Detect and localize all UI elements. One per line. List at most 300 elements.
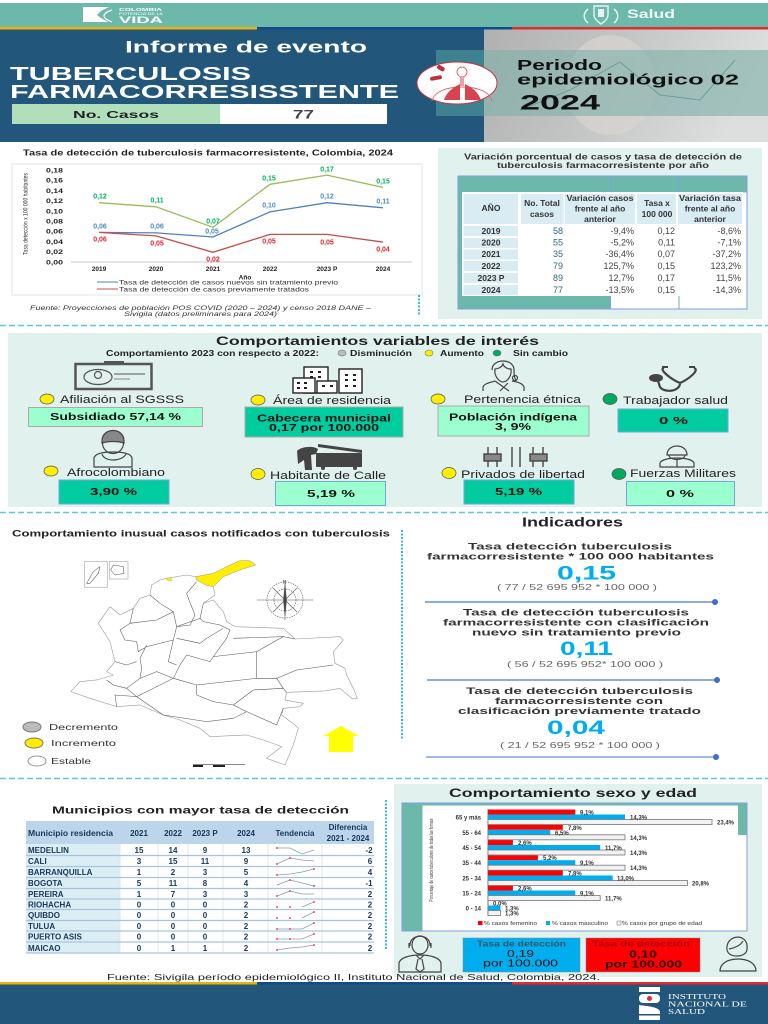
- map legend: Estable: [51, 756, 91, 766]
- municipal rows: 2: [368, 911, 373, 920]
- item: Privados de libertad: [442, 447, 585, 504]
- y axis labels: 0,04: [46, 239, 64, 246]
- indicator 3: ( 21 / 52 695 952 * 100 000 ): [500, 741, 661, 750]
- municipal rows: 1: [203, 944, 208, 953]
- municipal rows: 8: [203, 879, 208, 888]
- y axis labels: 0,10: [46, 208, 64, 215]
- item: Afiliación al SGSSS: Afiliación al SGSSS: [60, 394, 184, 406]
- icon: id card: [76, 361, 152, 389]
- table rows: 2019: [482, 226, 501, 236]
- source footer text: Fuente: Sivigila período epidemiológico II, Instituto Nacional de Salud, Colombia, 2024.: [107, 972, 600, 982]
- bar value labels: 14,3%: [630, 836, 648, 842]
- bar value labels: 20,8%: [692, 882, 710, 888]
- municipal rows: 2: [368, 944, 373, 953]
- table body: 35: [553, 249, 563, 259]
- chart legend: Tasa de detección de casos nuevos sin tratamiento previo: [119, 280, 338, 286]
- municipal rows: 0: [137, 911, 142, 920]
- table header: [482, 193, 741, 224]
- table body: 77: [553, 285, 563, 295]
- icon: prison bars: [484, 447, 547, 467]
- item: Fuerzas Militares: [612, 446, 737, 506]
- item: Habitante de Calle: 5,19 %: [307, 489, 355, 500]
- item: Área de residencia: 0,17 por 100.000: [269, 423, 380, 434]
- x axis labels: Año: [239, 274, 251, 282]
- indicator 1: ( 77 / 52 695 952 * 100 000 ): [497, 583, 658, 592]
- item: Privados de libertad: 5,19 %: [495, 487, 542, 498]
- box: female rate: [586, 938, 700, 972]
- municipal rows: 11: [169, 879, 178, 888]
- y axis labels: [46, 168, 64, 266]
- box: male rate: por 100.000: [483, 958, 559, 970]
- data labels: 0,04: [376, 246, 390, 254]
- table header: No. Total: [524, 198, 560, 208]
- table body: -13,5%: [605, 285, 634, 295]
- logo: Colombia Potencia de la Vida: [83, 7, 164, 25]
- title: [10, 64, 399, 102]
- age labels: [456, 816, 482, 912]
- icon: lungs and pills: [417, 62, 497, 104]
- municipal rows: 2: [244, 900, 249, 910]
- map legend: Incremento: [51, 738, 116, 748]
- municipal rows: 2: [244, 944, 249, 953]
- municipal rows: 3: [137, 857, 142, 866]
- period text: epidemiológico 02: [517, 72, 739, 88]
- bar value labels: 9,1%: [580, 892, 594, 898]
- municipal rows: -2: [365, 846, 373, 855]
- logo: Salud crest: [584, 6, 675, 24]
- indicator 3: clasificación previamente tratado: [458, 706, 701, 717]
- municipal rows: 3: [203, 868, 208, 877]
- compass rose: N: [282, 580, 286, 586]
- bar value labels: 9,1%: [580, 861, 594, 867]
- data labels: 0,15: [262, 176, 276, 182]
- logo: Colombia Potencia de la Vida: COLOMBIA: [119, 7, 163, 12]
- item: Pertenencia étnica: 3, 9%: [495, 422, 531, 433]
- box: male rate: 0,19: [507, 949, 535, 960]
- municipal rows: 2: [368, 900, 373, 910]
- case counter: [12, 104, 387, 124]
- table body: 0,15: [657, 261, 675, 271]
- municipal rows: 5: [137, 879, 142, 888]
- chart source note: Sivigila (datos preliminares para 2024): [124, 311, 277, 318]
- bar value labels: 11,7%: [605, 896, 622, 902]
- municipal rows: MAICAO: [28, 944, 60, 953]
- box: female rate: por 100.000: [605, 960, 683, 970]
- data labels: 0,06: [93, 224, 107, 230]
- indicator 2: nuevo sin tratamiento previo: [472, 628, 681, 638]
- bar legend: % casos femenino: [484, 921, 537, 927]
- table body: -7,1%: [717, 238, 741, 248]
- table body: 0,17: [657, 273, 675, 283]
- municipal rows: 1: [137, 868, 142, 877]
- municipal rows: 0: [137, 944, 142, 953]
- bar value labels: 2,6%: [518, 841, 532, 847]
- sparklines: [276, 847, 315, 951]
- case counter: 77: [293, 108, 314, 122]
- data labels: [93, 166, 390, 264]
- item: Área de residencia: [245, 367, 403, 437]
- indicator 2: farmacorresistente con clasificación: [443, 618, 709, 628]
- municipal rows: 0: [171, 932, 176, 942]
- data labels: 0,05: [150, 240, 164, 248]
- table rows: 2022: [482, 261, 501, 271]
- table header: 2021: [130, 829, 148, 838]
- item: Pertenencia étnica: [431, 361, 589, 436]
- x axis labels: 2020: [149, 266, 164, 273]
- table body: 0,15: [657, 285, 675, 295]
- municipal rows: 13: [242, 846, 251, 855]
- item: Afiliación al SGSSS: [28, 361, 202, 426]
- table body: -9,4%: [610, 226, 634, 236]
- compass rose: [257, 580, 313, 620]
- icon: stethoscope: [649, 367, 696, 391]
- bar value labels: 7,8%: [568, 872, 582, 878]
- scale bar: [193, 764, 245, 767]
- y axis title: Tasa detección x 100 000 habitantes: [22, 172, 30, 255]
- top government bar: [0, 3, 768, 28]
- table rows: 2021: [482, 249, 501, 259]
- bar value labels: 13,0%: [617, 876, 635, 882]
- item: Área de residencia: Área de residencia: [273, 394, 392, 407]
- municipal rows: [28, 846, 373, 953]
- table header: Variación tasa: [679, 193, 741, 203]
- bar value labels: 0,0%: [493, 902, 507, 908]
- bar value labels: 23,4%: [717, 820, 735, 826]
- age group bars: [488, 810, 712, 916]
- chart title: Tasa de detección de tuberculosis farmacorresistente, Colombia, 2024: [23, 148, 393, 158]
- y axis labels: 0,08: [46, 218, 64, 226]
- footer band: [0, 982, 768, 1024]
- y axis labels: 0,14: [46, 188, 64, 195]
- municipal rows: TULUA: [28, 922, 55, 931]
- logo: Instituto Nacional de Salud: NACIONAL DE: [668, 1000, 748, 1008]
- table title: tuberculosis farmacorresistente por año: [497, 161, 709, 170]
- item: Afrocolombiano: [44, 430, 169, 504]
- chart frame: [402, 803, 747, 931]
- table body: 11,5%: [716, 273, 741, 283]
- municipal rows: 0: [171, 911, 176, 920]
- x axis labels: 2022: [263, 266, 278, 273]
- panel: indicators: [425, 514, 720, 760]
- Colombia map: [71, 561, 357, 765]
- table body: 0,07: [657, 249, 675, 259]
- table title: Variación porcentual de casos y tasa de detección de: [464, 152, 743, 162]
- box: female rate: 0,10: [629, 950, 658, 960]
- box: male rate: [463, 938, 580, 972]
- municipal rows: 0: [171, 922, 176, 931]
- item: Fuerzas Militares: 0 %: [666, 489, 694, 500]
- municipal rows: 3: [244, 890, 249, 899]
- data labels: 0,11: [150, 198, 164, 204]
- title: FARMACORRESISSTENTE: [10, 82, 399, 102]
- item: Trabajador salud: 0 %: [659, 416, 688, 427]
- municipal rows: 4: [244, 879, 249, 888]
- indicator 3: farmacorresistente con: [495, 696, 663, 707]
- panel: municipalities table: [26, 806, 374, 953]
- indicator 1: farmacorresistente * 100 000 habitantes: [427, 552, 714, 562]
- data labels: 0,11: [376, 198, 390, 206]
- table backgrounds: [26, 821, 374, 953]
- indicator 1: Tasa detección tuberculosis: [468, 542, 672, 552]
- title: TUBERCULOSIS: [10, 64, 251, 84]
- item: Pertenencia étnica: Población indígena: [449, 412, 577, 424]
- case counter: No. Casos: [73, 109, 159, 121]
- x axis labels: [92, 266, 391, 282]
- item: Habitante de Calle: Habitante de Calle: [270, 470, 386, 482]
- table rows: 2024: [482, 285, 501, 295]
- table header: anterior: [584, 214, 617, 224]
- table header: Municipio residencia: [28, 829, 114, 838]
- period text: 2024: [520, 92, 601, 114]
- bar value labels: 14,3%: [630, 866, 648, 872]
- municipal rows: RIOHACHA: [28, 900, 71, 910]
- logo: Instituto Nacional de Salud: [639, 987, 748, 1020]
- x axis labels: 2021: [206, 266, 221, 273]
- table header: frente al año: [685, 204, 735, 214]
- municipal rows: 2: [244, 911, 249, 920]
- age labels: 35 - 44: [462, 861, 482, 867]
- tricolor stripe: [0, 27, 768, 30]
- icon: soldier: [660, 446, 694, 467]
- x axis labels: 2019: [92, 266, 107, 273]
- municipal rows: 1: [171, 944, 176, 953]
- indicator 2: Tasa de detección tuberculosis: [463, 608, 689, 618]
- chart frame: [12, 164, 422, 295]
- municipal rows: 0: [137, 922, 142, 931]
- table rows: [478, 226, 505, 295]
- bar value labels: 9,1%: [580, 810, 594, 816]
- municipal rows: 4: [368, 868, 373, 877]
- icon: woman: [720, 937, 756, 971]
- header banner: [0, 30, 768, 142]
- y axis labels: 0,06: [46, 229, 64, 236]
- period text: [517, 57, 739, 114]
- table header: frente al año: [575, 204, 625, 214]
- data labels: 0,02: [206, 256, 220, 264]
- bar value labels: 5,2%: [543, 856, 557, 862]
- bar legend: % casos masculino: [552, 921, 608, 927]
- table header: AÑO: [482, 203, 501, 213]
- box: female rate: Tasa de detección: [592, 940, 690, 948]
- table body: 79: [553, 261, 563, 271]
- municipal rows: -1: [365, 879, 373, 888]
- logo: Colombia Potencia de la Vida: POTENCIA DE LA: [119, 12, 164, 16]
- bar value labels: 2,6%: [518, 886, 532, 892]
- table header: 2024: [237, 829, 255, 838]
- y axis title: Porcentaje de casos tuberculosis de todas las formas: [429, 818, 435, 902]
- chart legend: Tasa de detección de casos previamente tratados: [119, 286, 310, 294]
- chart source note: Fuente: Proyecciones de población POS COVID (2020 – 2024) y censo 2018 DANE –: [30, 305, 372, 312]
- map legend: [23, 722, 118, 766]
- chart legend: [97, 280, 338, 294]
- table body: 125,7%: [603, 261, 634, 271]
- table header: anterior: [694, 214, 727, 224]
- table body: [462, 192, 743, 296]
- line chart panel: [12, 148, 422, 295]
- item: Habitante de Calle: [251, 444, 386, 506]
- icon: dumpster with person: [297, 444, 362, 470]
- indicator 2: [427, 608, 720, 683]
- item: Afrocolombiano: 3,90 %: [90, 487, 137, 498]
- table header: Tendencia: [276, 829, 315, 838]
- table body: -37,2%: [712, 249, 741, 259]
- logo: Colombia Potencia de la Vida: VIDA: [119, 15, 164, 25]
- municipal rows: 9: [203, 846, 208, 855]
- table rows: 2023 P: [478, 273, 505, 283]
- table frame: [458, 176, 747, 309]
- age labels: 65 y más: [456, 816, 482, 822]
- icon: man: [399, 936, 441, 972]
- period text: Periodo: [517, 57, 602, 74]
- municipal rows: 0: [171, 900, 176, 910]
- data labels: 0,12: [93, 194, 107, 200]
- municipal rows: 0: [203, 932, 208, 942]
- data labels: 0,05: [262, 238, 276, 246]
- municipal rows: 2: [171, 868, 176, 877]
- indicator 1: 0,15: [557, 564, 617, 584]
- box: male rate: Tasa de detección: [477, 940, 566, 948]
- indicator 1: [425, 542, 718, 605]
- table body: 0,11: [658, 238, 675, 248]
- yellow up arrow: [323, 726, 359, 752]
- municipal rows: 14: [169, 846, 178, 855]
- y axis labels: 0,00: [46, 259, 64, 266]
- bar value labels: 11,7%: [605, 846, 622, 852]
- municipal rows: 7: [171, 890, 176, 899]
- behaviour legend: Aumento: [440, 349, 484, 358]
- age labels: 15 - 24: [462, 892, 482, 898]
- municipal rows: PEREIRA: [28, 890, 64, 899]
- municipal rows: PUERTO ASIS: [28, 932, 82, 942]
- behaviour legend: [106, 349, 568, 358]
- item: Afiliación al SGSSS: Subsidiado 57,14 %: [50, 412, 181, 423]
- bar value labels: 14,3%: [630, 816, 648, 822]
- indicator 2: ( 56 / 52 695 952* 100 000 ): [507, 660, 664, 669]
- age labels: 25 - 34: [462, 876, 482, 882]
- data labels: 0,12: [320, 194, 334, 200]
- map heading: Comportamiento inusual casos notificados con tuberculosis: [12, 528, 390, 538]
- table body: 89: [553, 273, 563, 283]
- bar value labels: [493, 810, 735, 918]
- table body: 123,2%: [710, 261, 741, 271]
- municipal rows: 0: [203, 900, 208, 910]
- item: Trabajador salud: [603, 367, 728, 432]
- municipal rows: 5: [244, 868, 249, 877]
- icon: buildings: [293, 367, 362, 393]
- age labels: 45 - 54: [462, 846, 482, 852]
- municipal rows: 2: [244, 922, 249, 931]
- table body: 58: [553, 226, 563, 236]
- data labels: 0,15: [376, 178, 390, 186]
- table body: 12,7%: [608, 273, 634, 283]
- age labels: 0 - 14: [466, 906, 482, 912]
- panel: variables of interest: [8, 333, 762, 507]
- y axis labels: 0,02: [46, 249, 64, 256]
- indicator 3: Tasa de detección tuberculosis: [466, 686, 693, 697]
- data labels: 0,10: [262, 202, 276, 210]
- municipal rows: 0: [137, 932, 142, 942]
- item: Área de residencia: Cabecera municipal: [257, 412, 391, 424]
- municipal rows: 2: [244, 932, 249, 942]
- table body: -8,6%: [717, 226, 741, 236]
- data labels: 0,05: [320, 240, 334, 246]
- municipal rows: 0: [137, 900, 142, 910]
- table header: [28, 823, 370, 843]
- municipal rows: BARRANQUILLA: [28, 868, 93, 877]
- item: Afrocolombiano: Afrocolombiano: [67, 467, 165, 479]
- municipal rows: 15: [135, 846, 144, 855]
- age labels: 55 - 64: [462, 831, 482, 837]
- bar value labels: 7,8%: [568, 826, 582, 832]
- item: Pertenencia étnica: Pertenencia étnica: [464, 394, 582, 406]
- indicator 3: [426, 686, 719, 760]
- bar value labels: 1,3%: [505, 906, 519, 912]
- y axis labels: 0,18: [46, 168, 64, 174]
- municipal rows: 0: [203, 911, 208, 920]
- data labels: 0,06: [150, 224, 164, 230]
- table body: -5,2%: [610, 238, 634, 248]
- heading: Informe de evento: Informe de evento: [125, 38, 367, 56]
- data labels: 0,07: [206, 218, 220, 226]
- panel: map: [12, 528, 390, 767]
- behaviour legend: Disminución: [350, 349, 412, 358]
- municipal rows: 2: [368, 932, 373, 942]
- table header: Tasa x: [644, 198, 670, 208]
- municipal rows: BOGOTA: [28, 879, 63, 888]
- panel: sex and age: [394, 784, 762, 977]
- heading: Municipios con mayor tasa de detección: [52, 806, 349, 816]
- indicator 3: 0,04: [547, 718, 606, 739]
- logo: Salud crest: Salud: [627, 7, 675, 21]
- bar value labels: 14,3%: [630, 851, 648, 857]
- table header: 100 000: [642, 209, 673, 219]
- panel: yearly variation table: [438, 148, 762, 319]
- table body: 55: [553, 238, 563, 248]
- municipal rows: 2: [368, 890, 373, 899]
- series lines: [99, 175, 383, 252]
- data labels: 0,06: [93, 236, 107, 244]
- municipal rows: 3: [203, 890, 208, 899]
- municipal rows: 1: [137, 890, 142, 899]
- map legend: Decremento: [49, 722, 118, 732]
- bar legend: [478, 921, 702, 927]
- table rows: 2020: [482, 238, 501, 248]
- table header: 2021 - 2024: [327, 834, 370, 843]
- heading: Comportamiento sexo y edad: [449, 786, 697, 800]
- table body: -36,4%: [605, 249, 634, 259]
- item: Privados de libertad: Privados de libertad: [461, 469, 585, 481]
- y axis labels: 0,16: [46, 178, 64, 185]
- municipal rows: 2: [368, 922, 373, 931]
- municipal rows: 9: [244, 857, 249, 866]
- chart source note: [30, 305, 372, 318]
- bar value labels: 1,3%: [505, 912, 519, 918]
- municipal rows: 11: [201, 857, 210, 866]
- heading: Indicadores: [522, 514, 623, 530]
- y axis labels: 0,12: [46, 198, 64, 205]
- indicator 2: 0,11: [560, 639, 614, 660]
- data labels: 0,05: [205, 228, 219, 236]
- table header: 2022: [164, 829, 182, 838]
- behaviour legend: Comportamiento 2023 con respecto a 2022:: [106, 349, 319, 358]
- logo: Instituto Nacional de Salud: SALUD: [668, 1007, 706, 1016]
- municipal rows: 6: [368, 857, 373, 866]
- municipal rows: 0: [203, 922, 208, 931]
- table header: Variación casos: [566, 193, 634, 203]
- x axis labels: 2023 P: [317, 266, 338, 273]
- table header: 2023 P: [192, 829, 218, 838]
- item: Fuerzas Militares: Fuerzas Militares: [630, 468, 737, 480]
